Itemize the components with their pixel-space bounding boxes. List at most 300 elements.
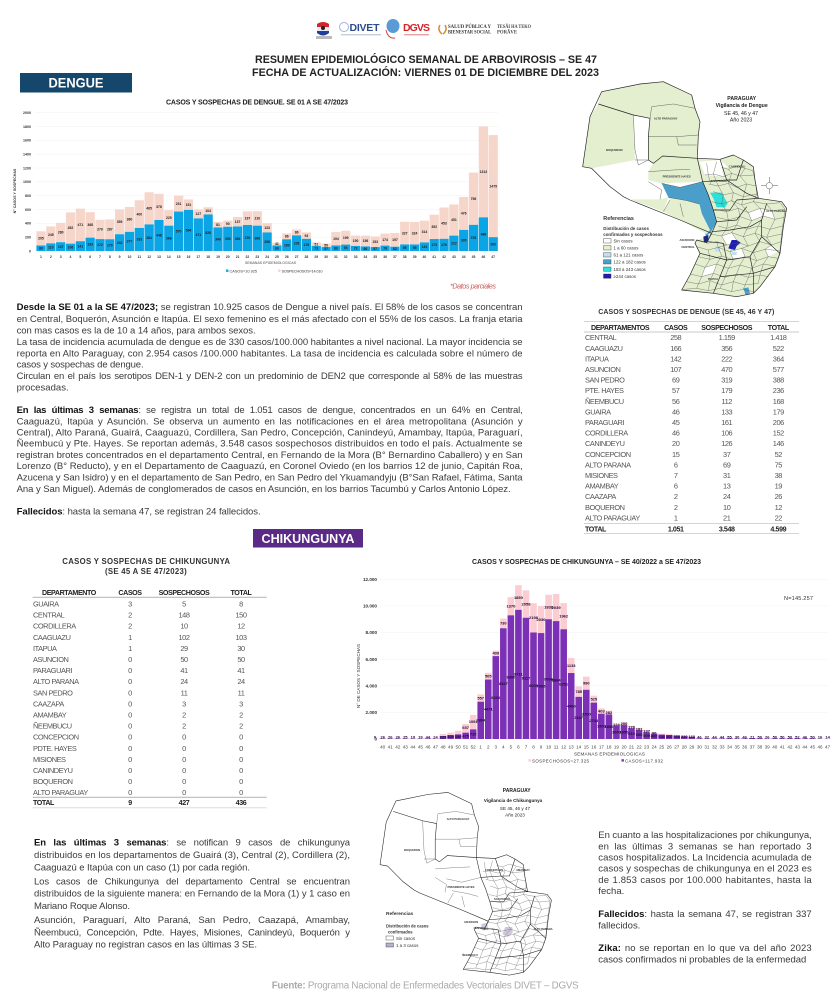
data labels: casos: 1850 — [604, 724, 614, 729]
map department labels: PRESIDENTE HAYES — [663, 175, 691, 179]
chart: dengue stacked bars — [13, 99, 498, 290]
data labels: sospechosos: 314 — [422, 230, 427, 234]
table rows: 126 — [721, 439, 733, 448]
x axis week labels: 9 — [119, 255, 121, 259]
map department labels: BOQUERON — [404, 848, 420, 852]
logo: DIVET: DIVET — [350, 22, 380, 34]
data labels: casos: 0 — [374, 734, 377, 740]
table rows: ÑEEMBUCU — [585, 397, 624, 406]
map title: Vigilancia de Dengue — [716, 103, 768, 109]
logo: ministerio de salud: SALUD PÚBLICA Y — [448, 24, 491, 30]
data labels: sospechosos: 245 — [48, 233, 54, 237]
table rows: 0 — [128, 688, 132, 697]
y axis labels: 2000 — [23, 111, 31, 115]
data labels: casos: 14 — [825, 734, 831, 740]
x axis: year 2022 and 2023 weeks: 37 — [750, 744, 755, 749]
table rows: CAAZAPA — [585, 492, 616, 501]
legend — [226, 269, 322, 273]
x axis week labels: 2 — [50, 255, 52, 259]
table rows: 133 — [721, 407, 733, 416]
table rows: PARAGUARI — [33, 666, 72, 675]
x axis week labels: 31 — [334, 255, 338, 259]
x axis week labels: 29 — [314, 255, 318, 259]
chart title: CASOS Y SOSPECHAS DE DENGUE. SE 01 A SE 47/2023 — [166, 99, 348, 106]
data labels: sospechosos: 200 — [621, 721, 628, 726]
x axis week labels: 3 — [60, 255, 62, 259]
map department labels: ASUNCION — [464, 920, 478, 924]
legend: SOSPECHOSOS=14.010 — [282, 269, 322, 273]
x axis week labels: 20 — [226, 255, 230, 259]
table rows: 57 — [672, 386, 680, 395]
data labels: casos: 2734 — [589, 718, 599, 723]
table rows: 29 — [180, 644, 188, 653]
table rows: 112 — [721, 397, 732, 406]
data labels: casos: 6234 — [491, 695, 501, 700]
data labels: sospechosos: 41 — [275, 242, 279, 246]
data labels: sospechosos: 287 — [107, 228, 113, 232]
table header: TOTAL — [230, 589, 253, 597]
data labels: casos: 242 — [117, 241, 123, 245]
map title: PARAGUAY — [727, 96, 757, 102]
table rows: 2 — [239, 710, 243, 720]
data labels: casos: 333 — [136, 238, 142, 242]
data labels: sospechosos: 1850 — [514, 595, 524, 600]
data labels: casos: 340 — [215, 237, 221, 241]
table rows: 0 — [128, 777, 132, 786]
data labels: casos: 95 — [413, 246, 417, 250]
data labels: sospechosos: 137 — [235, 220, 241, 224]
x axis week labels: 27 — [295, 255, 299, 259]
x axis week labels: 35 — [373, 255, 377, 259]
data labels: sospechosos: 471 — [77, 223, 83, 227]
data labels: sospechosos: 93 — [305, 234, 308, 238]
text block: hospitalizations, deaths and zika: fecha. — [598, 886, 624, 897]
table rows: ASUNCION — [33, 655, 69, 664]
data labels: casos: 7965 — [537, 683, 546, 688]
data labels: sospechosos: 1091 — [469, 719, 478, 724]
text block: dengue summary: procesadas. — [17, 382, 69, 394]
text block: chikungunya last 3 weeks: Alto Paraguay no registran casos en las últimas 3 SE. — [34, 940, 257, 951]
table rows: GUAIRA — [33, 600, 59, 608]
text block: hospitalizations, deaths and zika: Zika: no se reportan en lo que va del año 2023 — [598, 943, 812, 954]
data labels: casos: 8327 — [499, 681, 509, 686]
data labels: sospechosos: 133 — [264, 226, 270, 230]
x axis title: SEMANAS EPIDEMIOLOGICAS — [245, 261, 297, 265]
table rows: 6 — [674, 482, 678, 491]
data labels: casos: 25 — [403, 734, 408, 740]
y axis labels: 600 — [25, 208, 31, 212]
table header — [591, 324, 790, 332]
chart: chikungunya stacked bars — [356, 559, 831, 763]
data labels: casos: 448 — [156, 234, 162, 238]
compass — [761, 177, 778, 194]
table title: CASOS Y SOSPECHAS DE DENGUE (SE 45, 46 Y 47) — [598, 309, 774, 316]
table: dengue by department — [584, 309, 799, 533]
n total: N=145.257 — [784, 596, 813, 602]
data labels: sospechosos: 51 — [314, 242, 318, 246]
table rows: 52 — [775, 450, 782, 459]
data labels: sospechosos: 1475 — [489, 184, 497, 188]
data labels: sospechosos: 194 — [333, 237, 339, 241]
table rows: 522 — [773, 344, 784, 353]
data labels: sospechosos: 403 — [598, 708, 606, 713]
x axis: year 2022 and 2023 weeks: 15 — [584, 744, 589, 749]
map legend: Sin casos — [614, 239, 633, 244]
data labels: casos: 200 — [490, 242, 496, 246]
data labels: sospechosos: 210 — [254, 217, 260, 221]
data labels: casos: 26 — [765, 734, 770, 740]
data labels: casos: 46 — [803, 734, 808, 740]
x axis week labels: 39 — [413, 255, 417, 259]
table rows: 236 — [773, 386, 784, 395]
table rows: 2 — [674, 492, 678, 501]
data labels: sospechosos: 104 — [205, 209, 211, 213]
data labels: casos: 55 — [727, 734, 732, 740]
map department labels: ITAPUA — [708, 277, 718, 281]
map legend: Distribución de casos — [603, 226, 649, 231]
data labels: casos: 384 — [146, 236, 152, 240]
table rows: 0 — [128, 710, 132, 720]
x axis week labels: 11 — [138, 255, 141, 259]
table rows: 168 — [773, 397, 784, 406]
data labels: casos: 52 — [795, 734, 800, 740]
table rows: 56 — [672, 397, 680, 406]
map: chikungunya — [380, 788, 553, 975]
text block: dengue summary: Desde la SE 01 a la SE 47/2023; se registran 10.925 casos de Dengue a nivel país. El 58% de los casos se concentran — [17, 302, 523, 313]
map title: Año 2023 — [505, 812, 525, 818]
table header — [42, 589, 253, 597]
data labels: casos: 71 — [750, 734, 755, 740]
x axis: year 2022 and 2023 weeks: 50 — [456, 744, 461, 749]
table rows: 15 — [672, 450, 680, 459]
table rows: 22 — [775, 514, 782, 523]
map title: SE 45, 46 y 47 — [724, 111, 758, 117]
x axis: year 2022 and 2023 weeks: 27 — [674, 744, 680, 749]
data labels: casos: 225 — [440, 734, 447, 740]
map department labels: ASUNCION — [680, 238, 694, 242]
data labels: casos: 2804 — [476, 718, 486, 723]
table rows: 10 — [180, 622, 188, 631]
table rows: CAAGUAZU — [33, 633, 71, 642]
text block: hospitalizations, deaths and zika: Fallecidos: hasta la semana 47, se registran 337 — [598, 909, 812, 920]
x axis week labels: 40 — [423, 255, 426, 259]
table rows: 148 — [179, 611, 190, 620]
data labels: sospechosos: 280 — [58, 231, 64, 235]
logo: ministerio de salud — [439, 24, 492, 36]
text block: chikungunya last 3 weeks: Asunción, Paraguarí, Alto Paraná, San Pedro, Caazapá, Amambay, — [34, 915, 350, 926]
text block: chikungunya last 3 weeks: distribuidos de la siguiente manera: en Fernando de la Mora (1) y 1 caso en — [34, 889, 350, 900]
map department labels: CANINDEYU — [729, 164, 745, 168]
table header: SOSPECHOSOS — [159, 589, 210, 597]
x axis: year 2022 and 2023 weeks: 9 — [540, 744, 543, 749]
x axis week labels: 17 — [196, 255, 200, 259]
data labels: sospechosos: 81 — [216, 223, 220, 227]
x axis week labels: 38 — [403, 255, 407, 259]
data labels: sospechosos: 153 — [372, 240, 378, 244]
x axis: year 2022 and 2023 weeks: 45 — [418, 744, 423, 749]
table rows: PARAGUARI — [585, 418, 624, 427]
table rows: CAAGUAZU — [585, 344, 623, 353]
x axis: year 2022 and 2023 weeks: 6 — [517, 744, 520, 749]
table rows: 0 — [239, 744, 243, 753]
table rows: BOQUERON — [585, 503, 625, 512]
table rows: 41 — [237, 666, 245, 675]
table title — [62, 557, 230, 576]
data labels: sospechosos: 453 — [441, 221, 447, 225]
table header: DEPARTAMENTOS — [591, 324, 650, 332]
map legend — [603, 216, 663, 279]
y axis labels: 0 — [374, 737, 377, 742]
table rows: 142 — [670, 354, 682, 363]
data labels: casos: 305 — [461, 239, 467, 243]
map department labels: ÑEEMBUCU — [462, 952, 478, 957]
data labels: casos: 300 — [447, 734, 455, 739]
table rows: 30 — [237, 644, 245, 653]
table rows: AMAMBAY — [33, 710, 67, 720]
text block: chikungunya last 3 weeks: Ñeembucú, Concepción, Pdte. Hayes, Misiones, Canindeyú, Boquerón y — [34, 927, 350, 938]
x axis: year 2022 and 2023 weeks: 17 — [599, 744, 604, 749]
x axis week labels: 41 — [432, 255, 436, 259]
map department labels: CENTRAL — [681, 245, 695, 249]
x axis week labels: 12 — [147, 255, 151, 259]
x axis week labels: 4 — [70, 255, 72, 259]
data labels: casos: 9711 — [514, 672, 524, 677]
data labels: sospechosos: 127 — [195, 212, 201, 216]
data labels: casos: 80 — [334, 246, 338, 250]
table rows: 10 — [723, 503, 731, 512]
data labels: sospechosos: 86 — [295, 231, 299, 235]
text block: dengue summary: reporta en Alto Paraguay, con 2.954 casos /100.000 habitantes. La tasa de incidencia es calculada sobre el número de — [17, 348, 523, 359]
table rows: 0 — [239, 777, 243, 786]
table rows: ITAPUA — [585, 354, 609, 363]
data labels: casos: 528 — [205, 231, 211, 235]
data labels: sospechosos: 151 — [186, 203, 191, 207]
map legend: ≥244 casos — [614, 274, 637, 279]
note: *Datos parciales — [450, 282, 496, 290]
x axis: year 2022 and 2023 weeks: 39 — [765, 744, 770, 749]
logo: tesãi: PORÃVE — [497, 30, 518, 36]
data labels: casos: 19 — [418, 734, 423, 740]
x axis: year 2022 and 2023 weeks: 33 — [719, 744, 725, 749]
y axis labels: 1000 — [23, 180, 31, 184]
x axis: year 2022 and 2023 weeks: 26 — [667, 744, 672, 749]
table rows: 0 — [182, 777, 186, 786]
table rows: 0 — [239, 733, 243, 742]
x axis week labels: 37 — [393, 255, 397, 259]
table rows: 0 — [128, 733, 132, 742]
text block: hospitalizations, deaths and zika — [598, 830, 812, 965]
x axis week labels: 33 — [354, 255, 358, 259]
x axis week labels: 36 — [383, 255, 387, 259]
table title: (SE 45 A SE 47/2023) — [105, 567, 187, 576]
x axis week labels: 24 — [265, 255, 269, 259]
data labels: casos: 170 — [107, 243, 113, 247]
data labels: sospechosos: 197 — [392, 238, 398, 242]
data labels: casos: 44 — [426, 734, 431, 740]
table rows: 103 — [236, 633, 247, 642]
data labels: casos: 173 — [431, 243, 437, 247]
x axis: year 2022 and 2023 weeks: 23 — [644, 744, 650, 749]
x axis: year 2022 and 2023 weeks: 11 — [554, 744, 559, 749]
table rows: 12 — [237, 622, 245, 631]
table rows: 37 — [723, 450, 731, 459]
logo: DGVS — [386, 19, 430, 38]
map title: Año 2023 — [730, 118, 752, 124]
x axis week labels: 25 — [275, 255, 279, 259]
table rows: 2 — [182, 722, 186, 731]
table rows: CANINDEYU — [585, 439, 625, 448]
table rows: 2 — [182, 710, 186, 720]
x axis week labels: 18 — [206, 255, 210, 259]
x axis: year 2022 and 2023 weeks: 22 — [637, 744, 642, 749]
table total: 1.051 — [668, 525, 684, 533]
table: chikungunya by department — [33, 557, 267, 808]
x axis: year 2022 and 2023 weeks: 16 — [591, 744, 597, 749]
data labels: casos: 330 — [658, 734, 666, 739]
table rows: 1.159 — [719, 333, 735, 342]
x axis: year 2022 and 2023 weeks: 43 — [403, 744, 408, 749]
data labels: casos: 4960 — [567, 703, 576, 708]
table rows: 26 — [775, 492, 782, 501]
data labels: casos: 57 — [324, 247, 328, 251]
text block: dengue last 3 weeks — [17, 405, 523, 495]
y axis labels: 200 — [25, 236, 31, 240]
data labels: casos: 226 — [294, 241, 300, 245]
text block: dengue last 3 weeks: En las últimas 3 semanas: se registra un total de 1.051 casos de dengue, concentrados en un 64% en Central, — [17, 405, 523, 416]
data labels: casos: 193 — [87, 242, 93, 246]
table rows: CENTRAL — [33, 611, 65, 620]
data labels: casos: 810 — [628, 731, 636, 736]
y axis labels: 400 — [25, 222, 31, 226]
icon: flag emblem — [316, 22, 332, 39]
table rows: 8 — [239, 600, 243, 608]
data labels: casos: 172 — [97, 243, 103, 247]
table total: 436 — [236, 799, 247, 807]
x axis week labels: 22 — [246, 255, 249, 259]
data labels: casos: 32 — [705, 734, 710, 740]
y axis labels — [23, 111, 31, 253]
text block: hospitalizations, deaths and zika: fallecidos. — [598, 920, 640, 931]
data labels: sospechosos: 197 — [245, 216, 250, 220]
table rows: 0 — [239, 766, 243, 775]
data labels: sospechosos: 1370 — [506, 604, 516, 608]
x axis: year 2022 and 2023 weeks: 41 — [780, 744, 785, 749]
map department labels: ALTO PARANA — [533, 927, 553, 931]
x axis: year 2022 and 2023 weeks: 5 — [510, 744, 513, 749]
data labels: casos: 66 — [364, 247, 367, 251]
table rows: 46 — [672, 429, 680, 438]
x axis: year 2022 and 2023 weeks: 40 — [772, 744, 778, 749]
title: FECHA DE ACTUALIZACIÓN: VIERNES 01 DE DICIEMBRE DEL 2023 — [252, 66, 599, 79]
data labels: casos: 44 — [720, 734, 725, 740]
table rows: CENTRAL — [585, 333, 617, 342]
table rows: 161 — [721, 418, 733, 427]
table rows: 1 — [128, 644, 132, 653]
data labels: casos: 169 — [284, 243, 290, 247]
data labels: sospechosos: 205 — [38, 237, 44, 241]
data labels: casos: 73 — [314, 247, 318, 251]
table rows: ALTO PARANA — [585, 460, 631, 469]
table rows: ASUNCION — [585, 365, 621, 374]
x axis week labels: 26 — [285, 255, 289, 259]
x axis: year 2022 and 2023 weeks: 30 — [697, 744, 702, 749]
map department labels: CONCEPCION — [485, 868, 503, 872]
data labels: sospechosos: 476 — [461, 212, 467, 216]
text block: chikungunya last 3 weeks — [34, 838, 351, 951]
table rows: 206 — [773, 418, 784, 427]
x axis: year 2022 and 2023 weeks: 19 — [614, 744, 619, 749]
x axis: year 2022 and 2023 weeks: 32 — [712, 744, 717, 749]
x axis: year 2022 and 2023 weeks: 18 — [606, 744, 612, 749]
data labels: sospechosos: 282 — [606, 710, 613, 715]
heading: DENGUE — [20, 73, 132, 92]
x axis: year 2022 and 2023 weeks: 41 — [388, 744, 393, 749]
table rows: 1 — [128, 633, 132, 642]
x axis: year 2022 and 2023 weeks: 1 — [479, 744, 482, 749]
data labels: casos: 80 — [39, 246, 43, 250]
data labels: casos: 78 — [383, 246, 387, 250]
table rows: 146 — [773, 439, 784, 448]
legend: CASOS=10.925 — [230, 269, 257, 273]
data labels: casos: 95 — [403, 246, 407, 250]
data labels: sospechosos: 50 — [324, 244, 328, 248]
data labels: casos: 725 — [470, 732, 477, 736]
table rows: 0 — [128, 755, 132, 764]
y axis labels: 1800 — [23, 125, 31, 129]
data labels: casos: 366 — [166, 236, 172, 240]
legend: SOSPECHOSOS=27.325 — [532, 758, 590, 763]
text block: dengue summary: Circulan en el país los serotipos DEN-1 y DEN-2 con un predominio de DEN2 que corresponde al 58% de las muestras — [17, 371, 523, 382]
map department labels: ALTO PARAGUAY — [654, 116, 678, 120]
text block: hospitalizations, deaths and zika: casos y sospechas de chikungunya en el 2023 es — [598, 864, 812, 875]
table total: TOTAL — [585, 525, 607, 533]
table rows: 0 — [128, 666, 132, 675]
text block: hospitalizations, deaths and zika: casos hospitalizados. La Incidencia acumulada de — [598, 852, 812, 863]
x axis week labels: 32 — [344, 255, 348, 259]
x axis: year 2022 and 2023 weeks: 49 — [448, 744, 454, 749]
data labels: casos: 73 — [354, 247, 358, 251]
x axis week labels: 10 — [128, 255, 131, 259]
map legend: Sin casos — [396, 936, 416, 941]
data labels: sospechosos: 86 — [285, 234, 289, 238]
table rows: 2 — [674, 503, 678, 512]
map title: SE 45, 46 y 47 — [500, 806, 531, 811]
x axis: year 2022 and 2023 weeks: 20 — [621, 744, 627, 749]
data labels: sospechosos: 324 — [412, 231, 418, 235]
map department labels: ALTO PARANA — [766, 209, 786, 213]
data labels: casos: 378 — [471, 236, 476, 240]
data labels: casos: 570 — [176, 230, 182, 234]
map legend — [386, 911, 429, 948]
table rows: CORDILLERA — [585, 429, 628, 438]
table header: CASOS — [664, 324, 688, 332]
heading: DENGUE: DENGUE — [48, 76, 104, 90]
x axis: year 2022 and 2023 weeks: 4 — [502, 744, 505, 749]
map legend: 1 a 60 casos — [614, 246, 639, 251]
data labels: casos: 222 — [451, 242, 457, 246]
table rows: 69 — [723, 460, 731, 469]
data labels: casos: 300 — [666, 734, 673, 739]
table rows: 0 — [182, 733, 186, 742]
title: RESUMEN EPIDEMIOLÓGICO SEMANAL DE ARBOVIROSIS – SE 47 — [255, 53, 597, 66]
data labels: casos: 475 — [462, 734, 470, 738]
map department labels: SAN PEDRO — [711, 179, 728, 183]
logo: DGVS: DGVS — [403, 22, 430, 34]
table rows: 150 — [236, 611, 247, 620]
table header: SOSPECHOSOS — [701, 324, 753, 332]
y axis labels: 1600 — [23, 139, 31, 143]
y axis labels: 800 — [25, 194, 31, 198]
